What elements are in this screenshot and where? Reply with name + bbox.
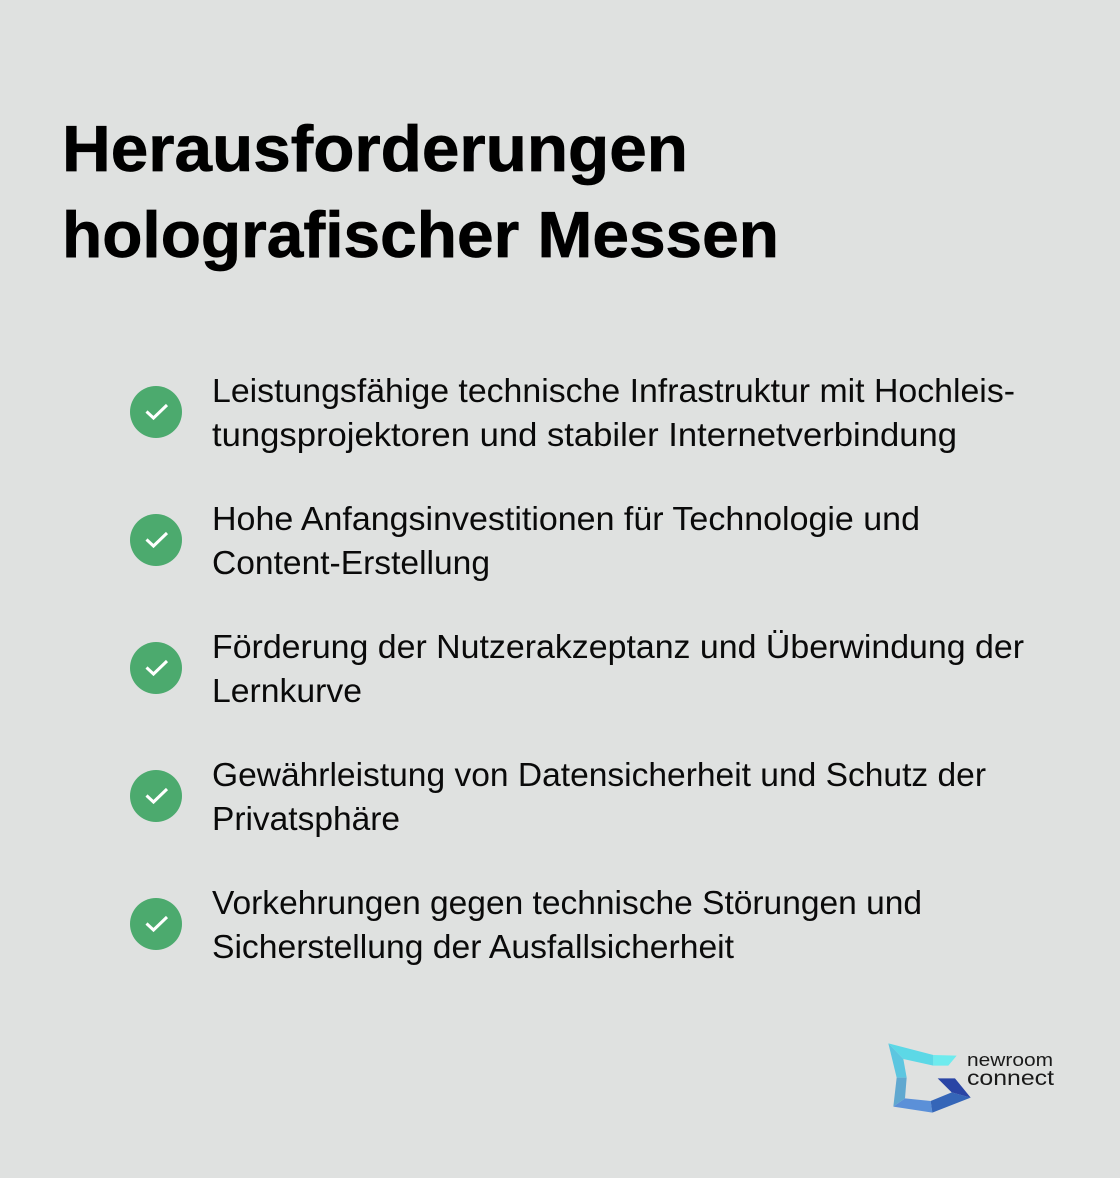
list item 2: investment: Hohe Anfangsinvestitionen für Technologie und xyxy=(212,500,920,537)
title: holografischer Messen xyxy=(62,198,779,271)
list item 5: reliability: Vorkehrungen gegen technische Störungen und xyxy=(212,884,922,921)
list item 1: infrastructure xyxy=(130,372,1015,453)
list of challenges xyxy=(130,372,1024,965)
list item 5: reliability: Sicherstellung der Ausfallsicherheit xyxy=(212,928,734,965)
list item 3: user acceptance xyxy=(130,628,1024,709)
list item 4: data security: Privatsphäre xyxy=(212,800,400,837)
list item 3: user acceptance: Lernkurve xyxy=(212,672,362,709)
list item 2: investment xyxy=(130,500,920,581)
list item 1: infrastructure: tungsprojektoren und stabiler Internetverbindung xyxy=(212,416,957,453)
title: Herausforderungen xyxy=(62,112,688,185)
logo wordmark xyxy=(967,1050,1054,1090)
list item 4: data security xyxy=(130,756,986,837)
icon: logo mark xyxy=(888,1043,971,1113)
logo wordmark: newroom xyxy=(967,1050,1053,1070)
list item 2: investment: Content-Erstellung xyxy=(212,544,490,581)
list item 5: reliability xyxy=(130,884,922,965)
list item 3: user acceptance: Förderung der Nutzerakzeptanz und Überwindung der xyxy=(212,628,1024,665)
logo: newroom connect xyxy=(888,1043,1054,1113)
list item 1: infrastructure: Leistungsfähige technische Infrastruktur mit Hochleis- xyxy=(212,372,1015,409)
logo wordmark: connect xyxy=(967,1067,1054,1090)
title xyxy=(62,112,779,271)
list item 4: data security: Gewährleistung von Datensicherheit und Schutz der xyxy=(212,756,986,793)
